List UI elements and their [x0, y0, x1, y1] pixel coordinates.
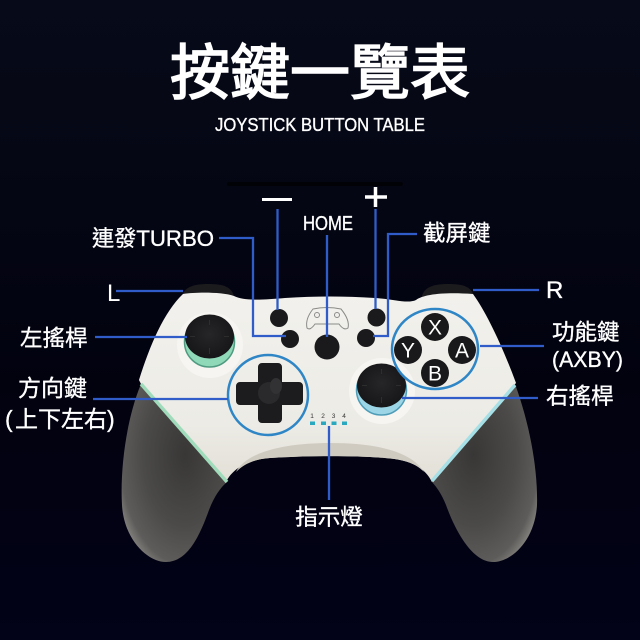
indicator lights: 1 [310, 413, 314, 420]
d-pad [240, 367, 299, 419]
blue light strip [432, 385, 515, 481]
label d-pad note: ( [5, 406, 13, 432]
label indicator: 指示燈 [295, 505, 363, 530]
label d-pad note: 上下左右 [15, 406, 107, 432]
label L: L [107, 280, 120, 307]
indicator lights [310, 413, 347, 425]
left stick [177, 312, 243, 378]
button A: A [455, 340, 469, 362]
indicator lights: 2 [321, 413, 325, 420]
controller body [139, 293, 516, 482]
label right stick: 右搖桿 [546, 384, 614, 409]
button Y: Y [401, 340, 415, 362]
button A [448, 336, 476, 364]
plus label [365, 187, 387, 207]
controller [122, 284, 537, 562]
label d-pad note: ) [107, 406, 115, 432]
small buttons [270, 308, 386, 360]
button X: X [428, 316, 442, 340]
leader lines [93, 209, 544, 500]
right bumper [420, 284, 478, 302]
button B: B [428, 362, 442, 386]
d-pad highlight ring [228, 355, 308, 435]
logo icon [307, 308, 348, 329]
green light strip [141, 384, 227, 482]
indicator lights: 3 [332, 413, 336, 420]
label function keys: 功能鍵 [552, 320, 620, 345]
label AXBY: (AXBY) [552, 347, 623, 372]
dark bar above controller [227, 182, 403, 186]
label d-pad: 方向鍵 [18, 375, 87, 401]
label HOME: HOME [303, 213, 353, 235]
subtitle: JOYSTICK BUTTON TABLE [215, 115, 425, 135]
label R: R [546, 277, 563, 304]
button Y [394, 336, 422, 364]
button X [421, 313, 449, 341]
title: 按鍵一覽表 [170, 40, 470, 107]
indicator lights: 4 [342, 413, 346, 420]
lower arch shading [236, 443, 424, 472]
ABXY highlight ring [392, 309, 478, 389]
minus label [262, 198, 292, 201]
label turbo: 連發TURBO [92, 226, 214, 251]
button B [421, 359, 449, 387]
label screenshot: 截屏鍵 [423, 221, 491, 246]
left grip [122, 384, 227, 562]
label left stick: 左搖桿 [20, 326, 88, 351]
left bumper [180, 284, 236, 302]
right stick [349, 358, 415, 424]
right grip [431, 384, 537, 562]
